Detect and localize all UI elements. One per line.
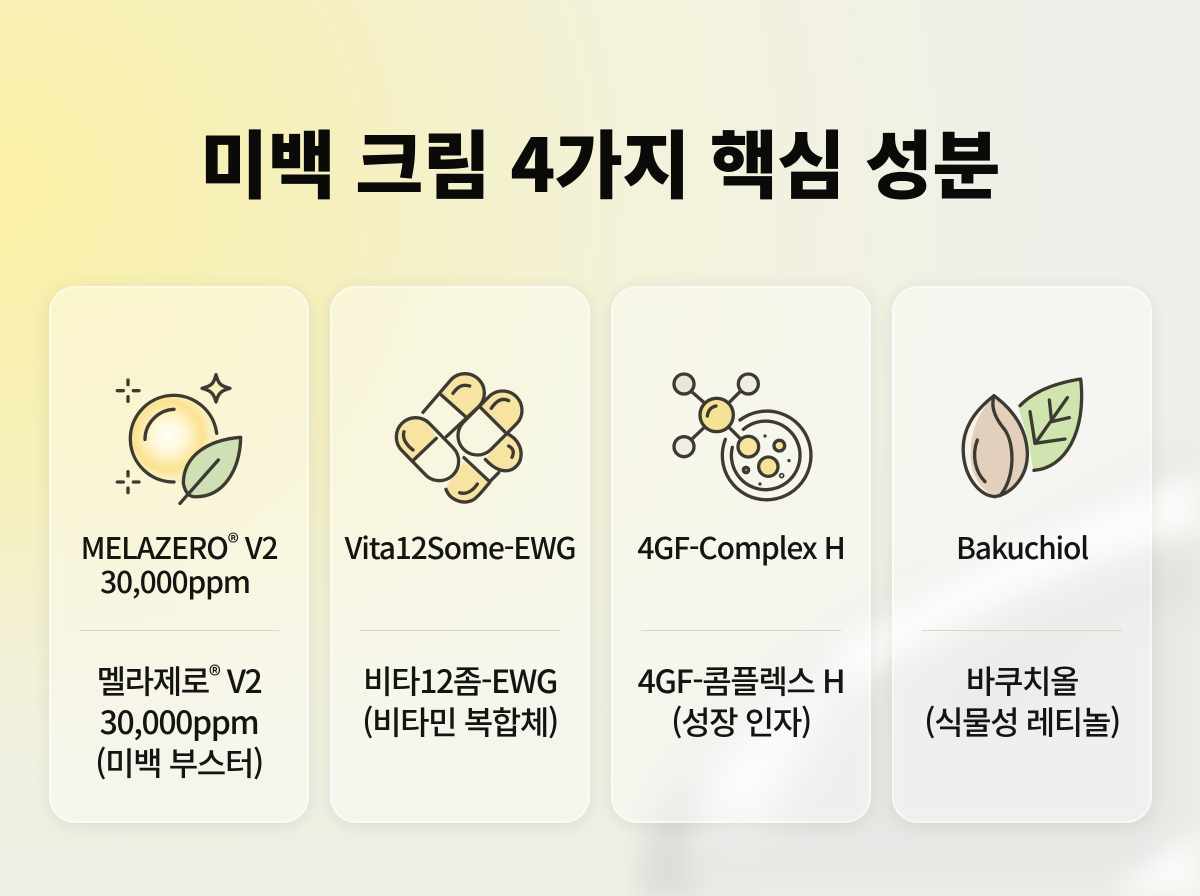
label: Korean name: 바쿠치올 [966, 657, 1078, 703]
panel: 4GF-Complex H [611, 286, 871, 823]
label: Korean name: (미백 부스터) [95, 739, 263, 785]
label: English name: Bakuchiol [956, 524, 1088, 568]
icon: seed and leaf [962, 377, 1084, 498]
label: Korean name: (성장 인자) [671, 698, 811, 744]
panel: Vita12Some [330, 286, 590, 823]
label: Korean name: 30,000ppm [100, 698, 258, 744]
panel: Bakuchiol [892, 286, 1152, 823]
label: Korean name [638, 657, 844, 744]
label: Korean name [924, 657, 1120, 744]
label: English name: 30,000ppm [100, 558, 250, 602]
label: Korean name: 멜라제로® V2 [97, 657, 261, 703]
label: English name: MELAZERO® V2 [81, 524, 277, 568]
title: 미백 크림 4가지 핵심 성분 [200, 107, 1000, 214]
label: English name: 4GF-Complex H [637, 524, 845, 568]
icon: capsules [394, 372, 524, 504]
label: Korean name: 비타12좀-EWG [363, 657, 557, 703]
label: Korean name: (식물성 레티놀) [924, 698, 1120, 744]
label: Korean name [362, 657, 558, 744]
label: English name [81, 524, 278, 602]
label: Korean name: 4GF-콤플렉스 H [638, 657, 844, 703]
label: Korean name: (비타민 복합체) [362, 698, 558, 744]
panel: MELAZERO [49, 286, 309, 823]
label: Korean name [95, 657, 263, 785]
icon: molecule and petri dish [672, 372, 813, 502]
icon: glowing sphere with leaf [116, 373, 242, 506]
label: English name: Vita12Some-EWG [345, 524, 575, 568]
